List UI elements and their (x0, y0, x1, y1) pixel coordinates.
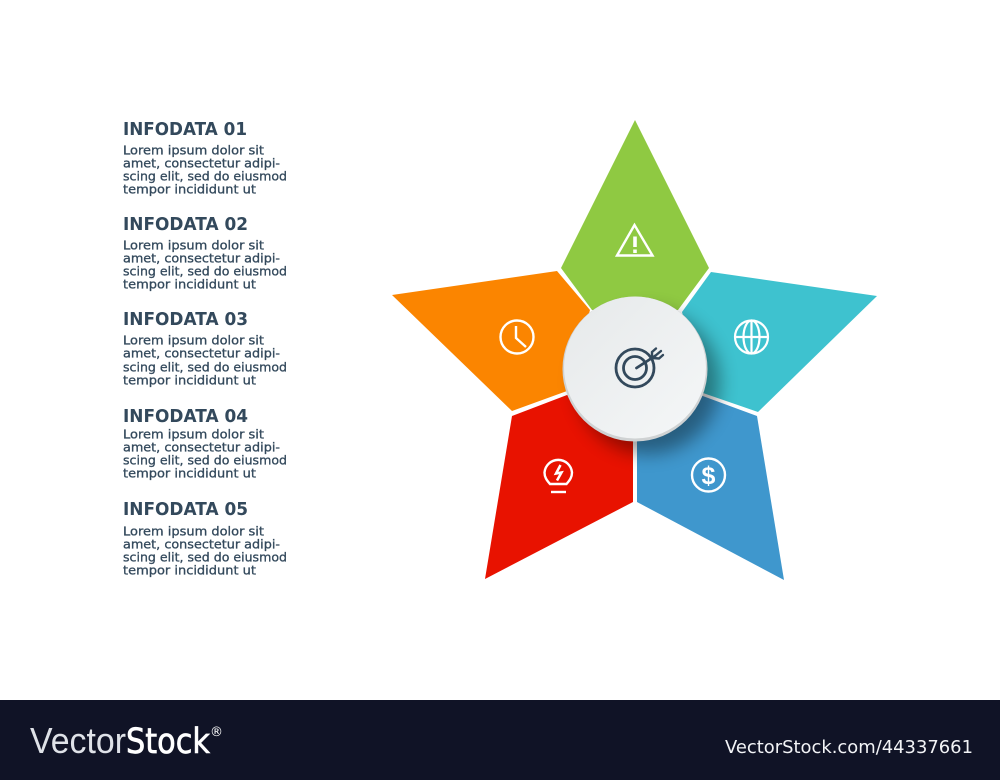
text block: infodata 01: scing elit, sed do eiusmod (123, 170, 287, 184)
icon: light bulb (544, 460, 572, 492)
text block: infodata 02: Lorem ipsum dolor sit (123, 238, 264, 252)
text block: infodata 05: INFODATA 05 (123, 499, 248, 520)
text block: infodata 04: INFODATA 04 (123, 406, 248, 427)
text block: infodata 04: Lorem ipsum dolor sit (123, 428, 264, 442)
text block: infodata 04: scing elit, sed do eiusmod (123, 454, 287, 468)
text block: infodata 03: tempor incididunt ut (123, 374, 256, 388)
footer url: VectorStock.com/44337661 (725, 737, 973, 758)
icon: target with dart (616, 348, 663, 387)
segment: teal (682, 272, 877, 412)
text block: infodata 05: tempor incididunt ut (123, 564, 256, 578)
footer logo: ® (210, 725, 223, 740)
text block: infodata 04 (123, 406, 287, 480)
text block: infodata 01: Lorem ipsum dolor sit (123, 144, 264, 158)
footer bar (0, 700, 1000, 780)
text block: infodata 02: tempor incididunt ut (123, 278, 256, 292)
text block: infodata 01: tempor incididunt ut (123, 182, 256, 196)
footer logo (30, 720, 223, 762)
text block: infodata 05: Lorem ipsum dolor sit (123, 524, 264, 538)
text block: infodata 01: amet, consectetur adipi- (123, 156, 280, 170)
icon: clock (500, 320, 534, 354)
segment: orange (392, 271, 590, 411)
segment: green (561, 120, 709, 310)
icon: warning triangle (617, 225, 652, 256)
text block: infodata 02: scing elit, sed do eiusmod (123, 264, 287, 278)
text block: infodata 01 (123, 119, 287, 196)
text block: infodata 03 (123, 309, 287, 388)
text block: infodata 02 (123, 214, 287, 292)
text block: infodata 05: amet, consectetur adipi- (123, 538, 280, 552)
segment: red (485, 395, 633, 579)
segment: blue (637, 395, 784, 580)
text block: infodata 01: INFODATA 01 (123, 119, 247, 140)
center disc (562, 296, 708, 442)
text block: infodata 05 (123, 499, 287, 578)
text block: infodata 04: amet, consectetur adipi- (123, 440, 280, 454)
text block: infodata 04: tempor incididunt ut (123, 466, 256, 480)
text block: infodata 03: INFODATA 03 (123, 309, 248, 330)
text block: infodata 03: scing elit, sed do eiusmod (123, 360, 287, 374)
icon: dollar coin (692, 458, 725, 492)
text block: infodata 03: amet, consectetur adipi- (123, 346, 280, 360)
text block: infodata 02: amet, consectetur adipi- (123, 252, 280, 266)
text block: infodata 03: Lorem ipsum dolor sit (123, 334, 264, 348)
text block: infodata 02: INFODATA 02 (123, 214, 248, 235)
footer logo: Vector (30, 720, 126, 761)
star chart (392, 120, 877, 580)
text block: infodata 05: scing elit, sed do eiusmod (123, 550, 287, 564)
disc shadow (576, 310, 720, 454)
icon: dollar coin: $ (702, 462, 716, 490)
icon: globe (735, 320, 768, 354)
footer logo: Stock (126, 722, 211, 762)
